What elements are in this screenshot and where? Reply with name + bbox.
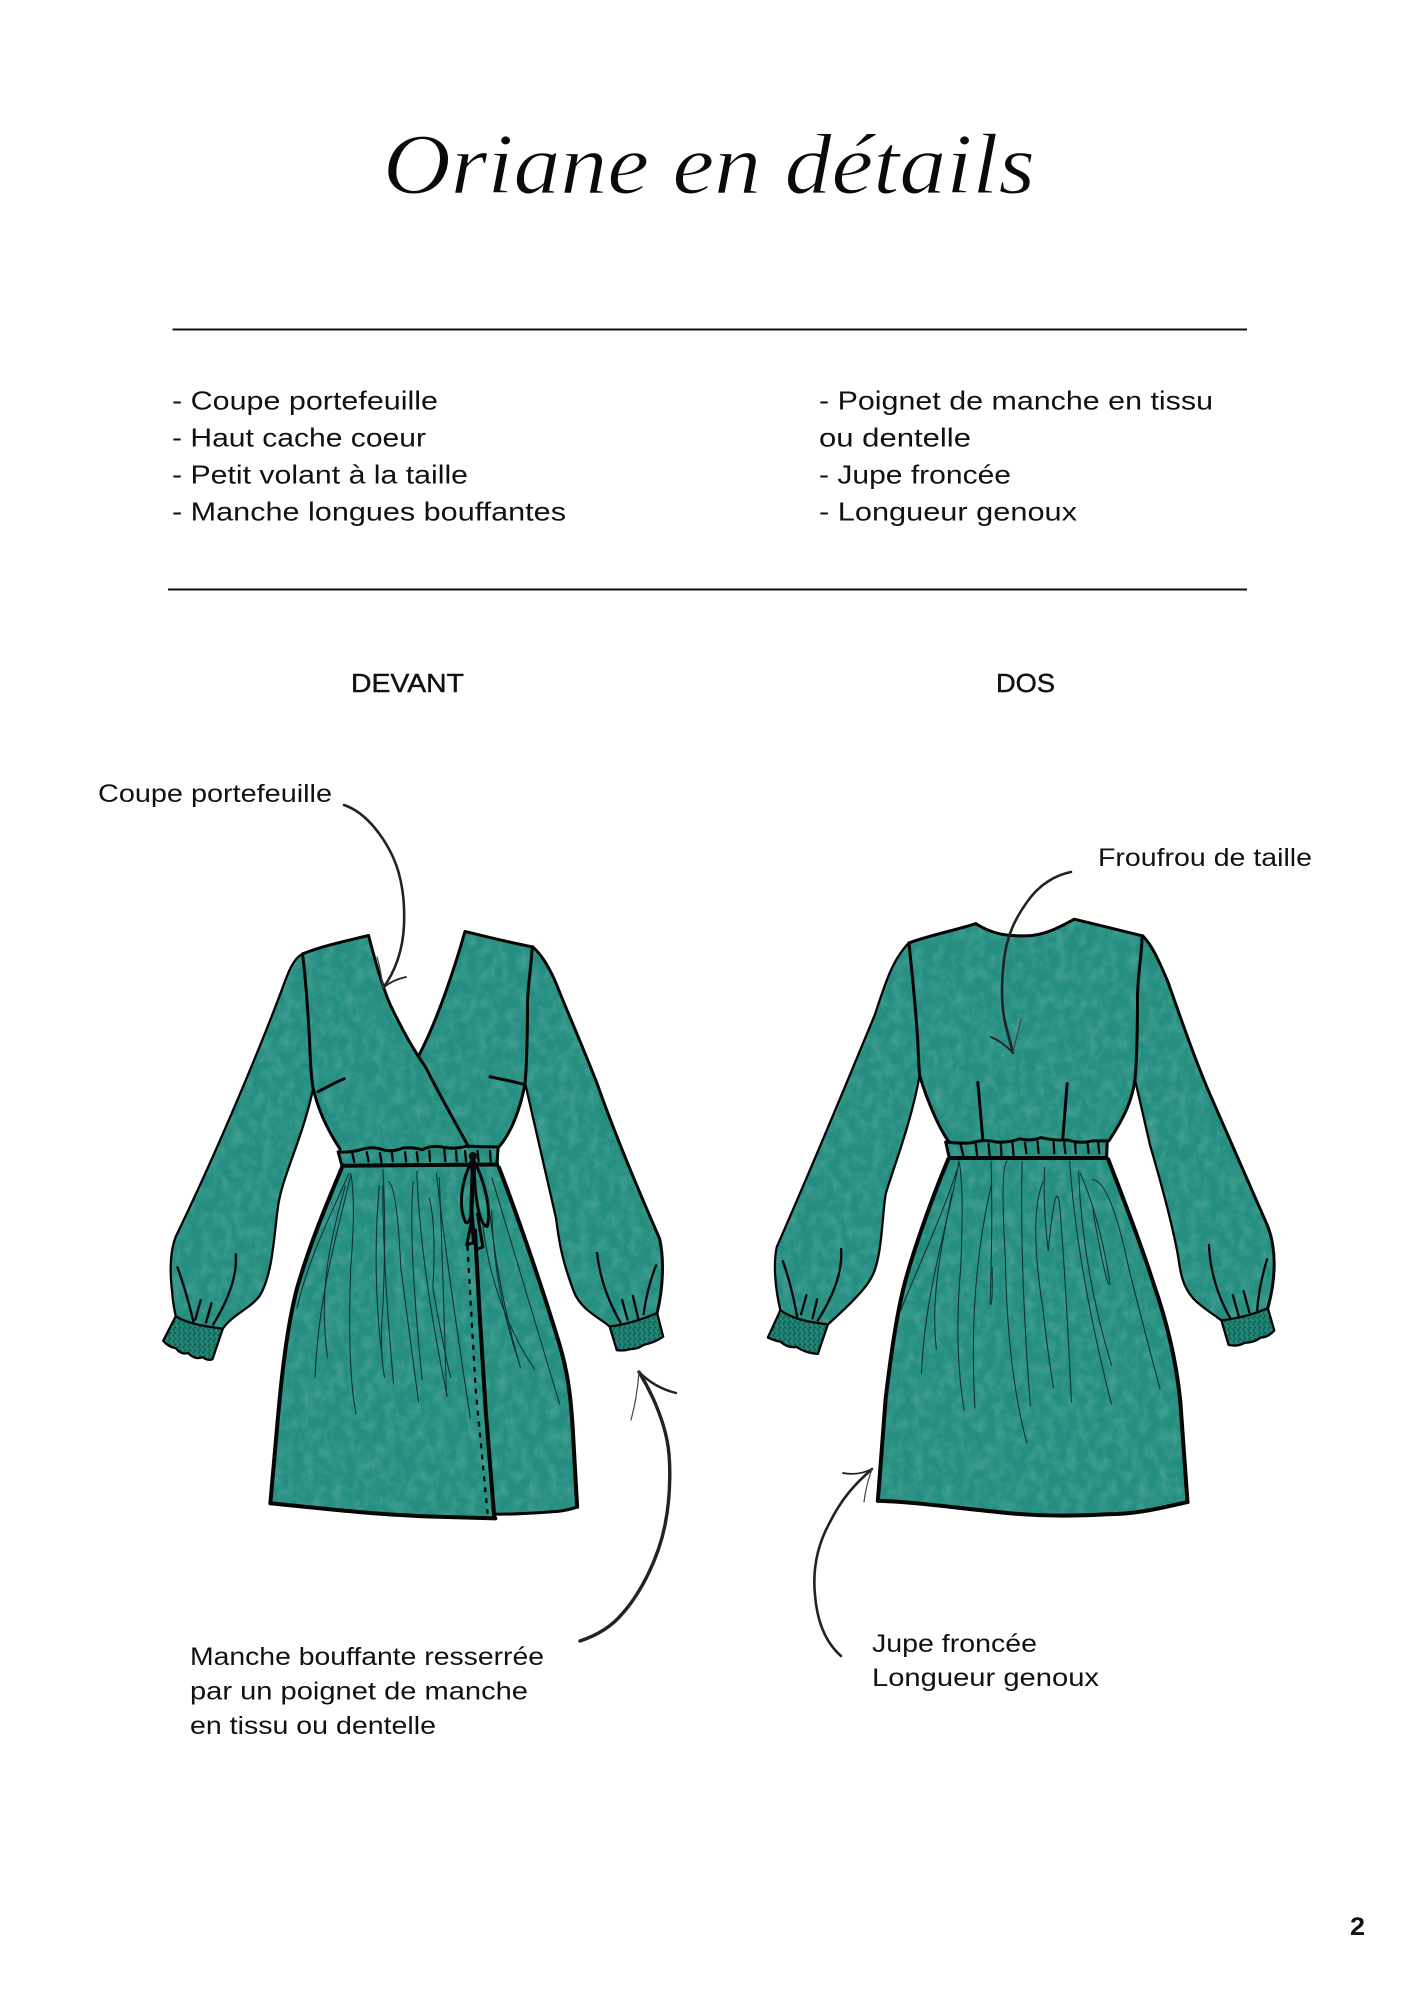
outlines [171,931,663,1518]
callout: puff sleeve: par un poignet de manche [190,1678,528,1706]
sleeve pleats [177,1253,656,1324]
callout: puff sleeve: en tissu ou dentelle [190,1712,436,1740]
sleeve pleats [783,1245,1267,1320]
feature line: ou dentelle [819,422,971,452]
features list: right column [819,386,1213,526]
arrow: to back waist [991,872,1071,1053]
heading: back view: DOS [996,668,1055,698]
callout: skirt: Longueur genoux [872,1664,1100,1692]
illustration: back of dress [768,919,1274,1516]
left cuff [163,1316,223,1360]
title: Oriane en détails [383,116,1035,212]
feature line: - Manche longues bouffantes [172,496,566,526]
skirt gathers [297,1169,560,1418]
feature line: - Coupe portefeuille [172,386,438,416]
feature line: - Poignet de manche en tissu [819,386,1213,416]
ruffled waistband [946,1138,1107,1158]
callout: skirt: Jupe froncée [872,1630,1037,1658]
left cuff [768,1310,828,1354]
ruffled waistband [338,1146,498,1166]
dress fill [768,919,1274,1516]
bottom divider [168,588,1247,590]
top divider [172,328,1247,330]
arrow: to wrap neckline [344,805,406,988]
feature line: - Haut cache coeur [172,422,426,452]
waist tie [461,1152,489,1249]
skirt gathers [900,1161,1160,1443]
feature line: - Jupe froncée [819,460,1011,490]
callout: skirt [872,1630,1100,1692]
feature line: - Longueur genoux [819,496,1077,526]
page number: 2 [1350,1913,1365,1941]
right cuff [1221,1308,1274,1346]
arrow: to cuff [580,1372,676,1641]
callout: wrap cut: Coupe portefeuille [98,780,332,808]
callout: waist frill: Froufrou de taille [1098,844,1312,872]
feature line: - Petit volant à la taille [172,460,468,490]
features list: left column [172,386,566,526]
callout: puff sleeve [190,1643,544,1740]
illustration: front of dress [163,931,663,1518]
heading: front view: DEVANT [351,668,464,698]
outlines [775,919,1274,1516]
dress fill [163,931,663,1518]
callout: puff sleeve: Manche bouffante resserrée [190,1643,544,1671]
stitching placket [467,1247,488,1516]
right cuff [610,1313,663,1350]
arrow: to skirt hem [814,1469,872,1656]
